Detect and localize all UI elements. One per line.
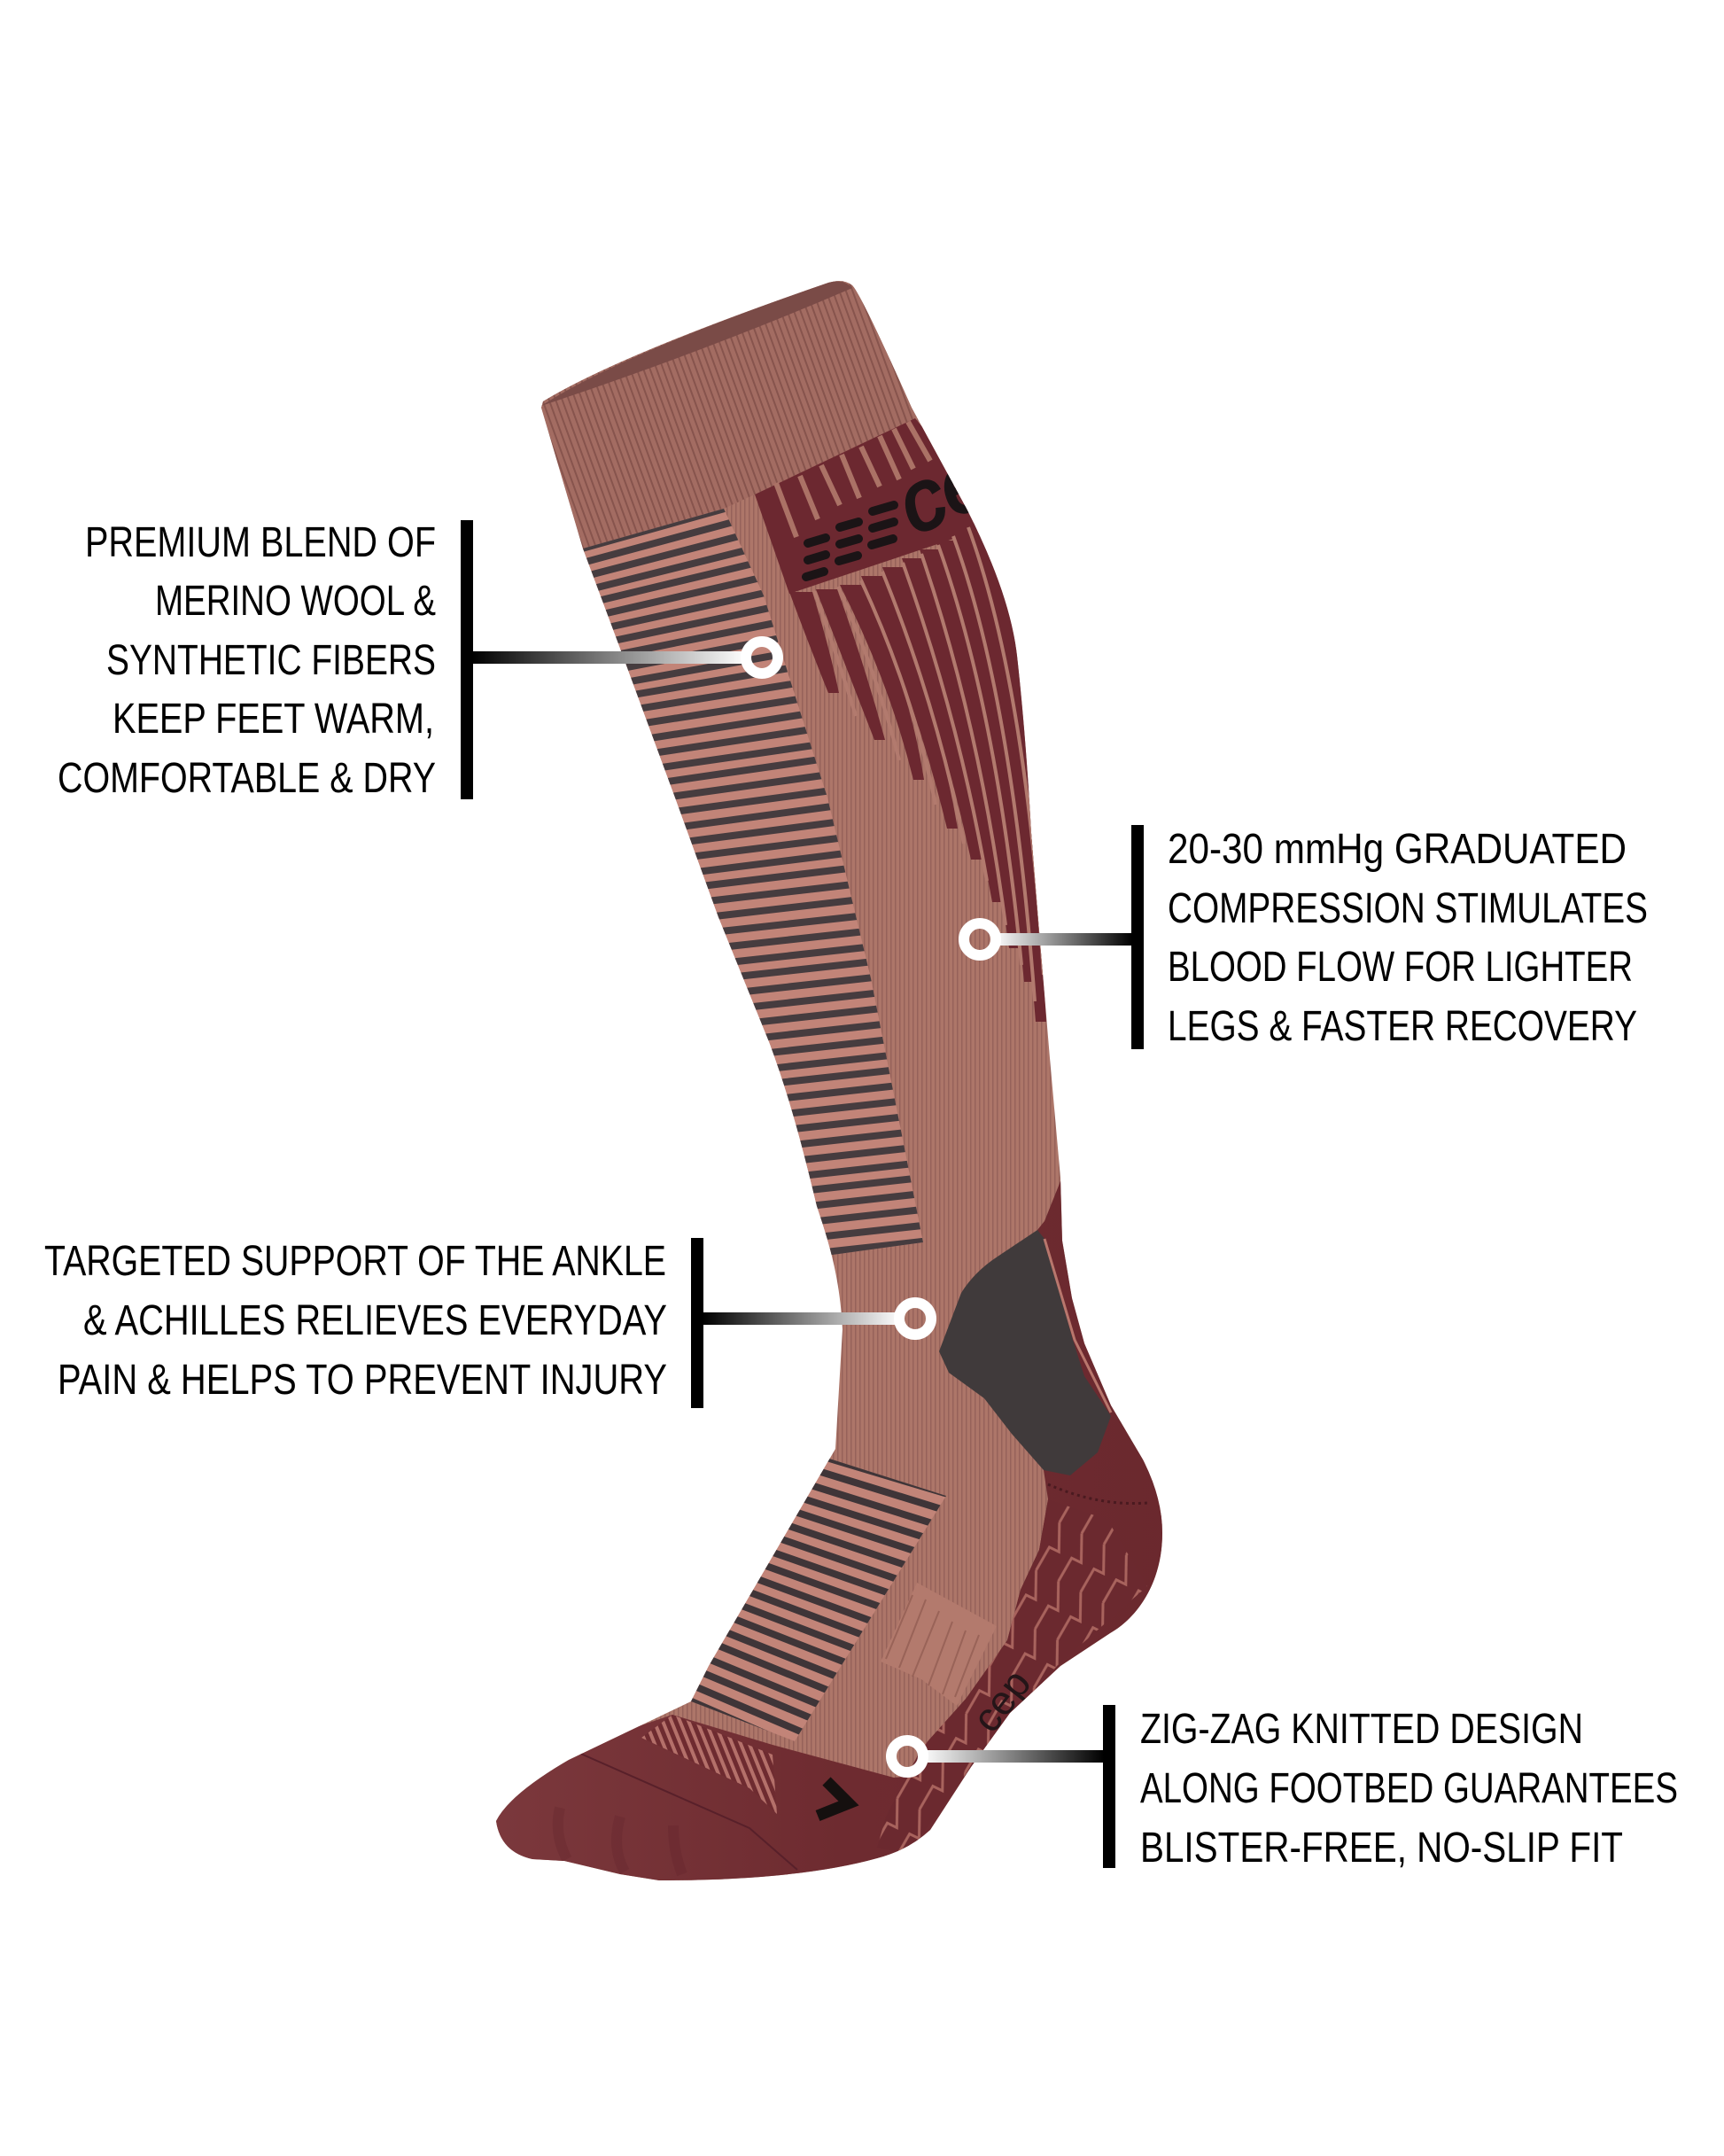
callout: graduated compression: [964, 825, 1648, 1050]
callout text: TARGETED SUPPORT OF THE ANKLE: [44, 1238, 666, 1285]
sock body: [496, 281, 1162, 1880]
callout text: & ACHILLES RELIEVES EVERYDAY: [83, 1297, 667, 1344]
toe seam and creases: [558, 1748, 797, 1874]
callout text: COMFORTABLE & DRY: [58, 755, 436, 802]
leader line: [703, 1312, 902, 1325]
marker ring: [899, 1303, 931, 1335]
marker ring: [964, 923, 996, 955]
callout text: [1168, 826, 1648, 1050]
callout text: [58, 519, 436, 802]
callout text: KEEP FEET WARM,: [113, 696, 434, 743]
callout: targeted ankle support: [44, 1238, 931, 1408]
callout text: PAIN & HELPS TO PREVENT INJURY: [58, 1357, 667, 1404]
callout text: [44, 1238, 667, 1404]
callout text: BLISTER-FREE, NO-SLIP FIT: [1140, 1825, 1623, 1872]
leader line: [472, 651, 747, 664]
toe direction mark: [818, 1781, 849, 1816]
marker ring: [891, 1740, 923, 1772]
sock illustration: [496, 281, 1162, 1880]
callout text: MERINO WOOL &: [155, 578, 436, 625]
foot fine-rib patch: [881, 1583, 997, 1706]
heel seam: [1048, 1484, 1147, 1504]
maroon heel, sole and toe: [496, 1181, 1162, 1880]
zig-zag sole knit: [879, 1499, 1147, 1852]
toe hatch band: [641, 1715, 777, 1814]
callout: premium blend of merino wool: [58, 519, 778, 802]
cuff band: [541, 281, 917, 549]
leader line: [994, 933, 1132, 946]
foot stripes panel: [691, 1459, 946, 1741]
cuff inner rim: [541, 281, 852, 406]
logo lettering: ce: [883, 429, 1004, 552]
patch edge stripe: [1044, 1239, 1111, 1413]
callout bar: [1103, 1705, 1115, 1868]
callout text: ZIG-ZAG KNITTED DESIGN: [1140, 1706, 1583, 1753]
maroon compression ribs: [755, 418, 1059, 1022]
marker ring: [746, 642, 778, 673]
callout text: SYNTHETIC FIBERS: [106, 637, 436, 684]
logo dashes: [806, 505, 894, 577]
ankle dark patch: [939, 1230, 1111, 1475]
calf stripes panel: [583, 509, 923, 1255]
sole logo: cep: [963, 1661, 1040, 1740]
callout bar: [691, 1238, 703, 1408]
callout bar: [1131, 825, 1144, 1049]
callout text: [1140, 1706, 1678, 1872]
callout bar: [461, 520, 473, 799]
callout: zig-zag knitted design: [891, 1705, 1678, 1872]
callout text: 20-30 mmHg GRADUATED: [1168, 826, 1627, 873]
leader line: [921, 1750, 1104, 1763]
callout text: PREMIUM BLEND OF: [85, 519, 436, 566]
